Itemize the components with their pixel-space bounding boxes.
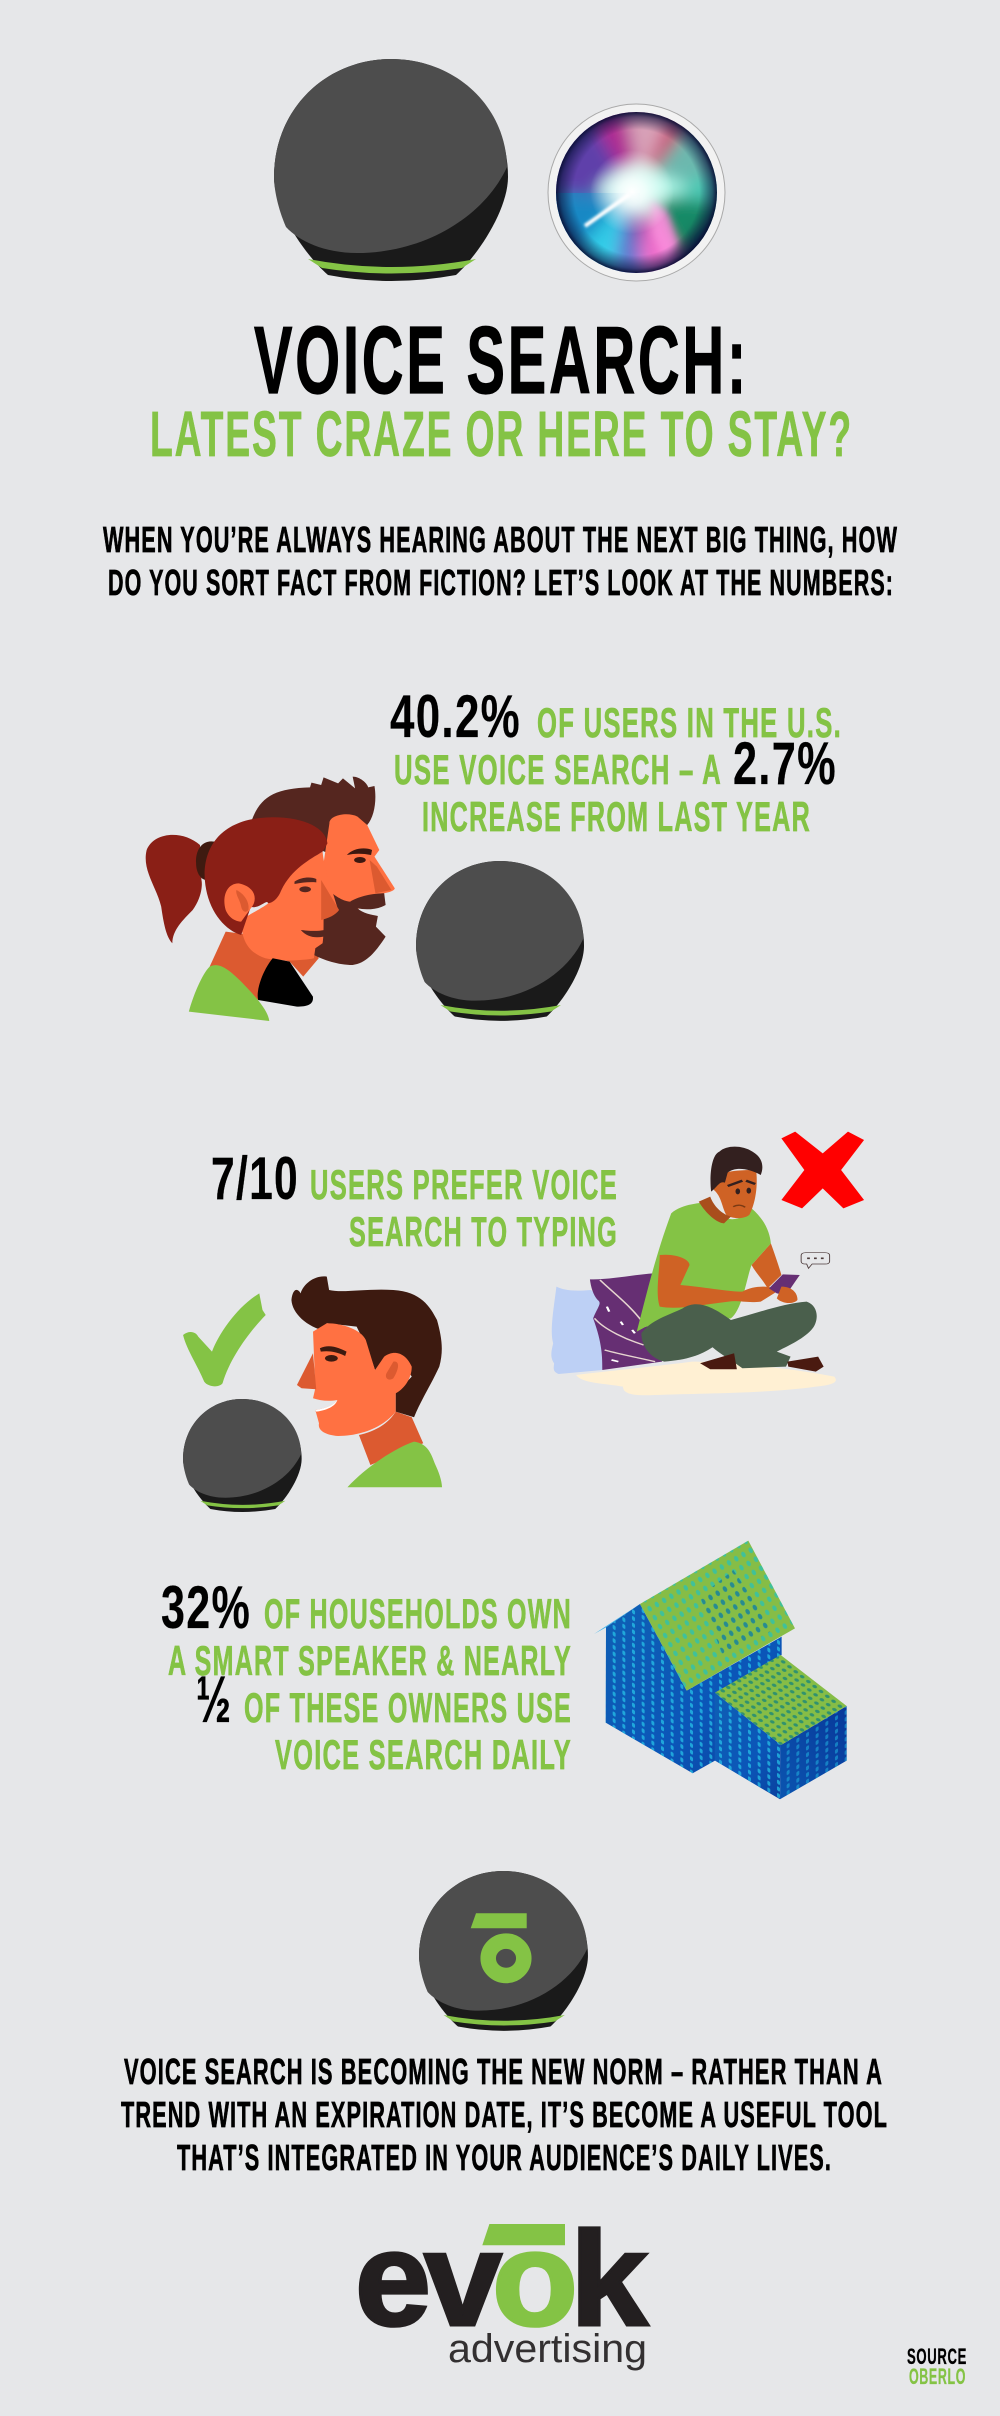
panel: 7/10 stat [183, 1132, 864, 1512]
illustration: couple in profile [146, 777, 395, 1021]
illustration: smiling man in profile [291, 1276, 442, 1487]
closing text [121, 2051, 888, 2178]
stat text: 32% of households: 32% [161, 1574, 251, 1641]
stat text: 32% of households [161, 1574, 572, 1778]
source note [907, 2344, 967, 2389]
icon: smart speaker [416, 861, 584, 1021]
stat text: 40.2% of users: USE VOICE SEARCH – A [394, 746, 722, 793]
illustration: man sitting with phone [551, 1147, 836, 1395]
logo: evok advertising: e [355, 2205, 431, 2354]
logo: evok advertising: v [424, 2205, 502, 2354]
illustration: house with digital pattern [594, 1541, 847, 1799]
stat text: 40.2% of users [390, 683, 842, 840]
stat text: 32% of households: ½ [196, 1662, 233, 1736]
icon: siri orb [548, 104, 726, 282]
stat text: 32% of households: VOICE SEARCH DAILY [275, 1731, 572, 1778]
intro text [103, 519, 898, 603]
logo: evok advertising: advertising [448, 2327, 647, 2371]
icon: smart speaker [183, 1399, 302, 1512]
stat text: 40.2% of users: 40.2% [390, 683, 521, 750]
stat text: 32% of households: OF HOUSEHOLDS OWN [264, 1590, 572, 1637]
icon: green check [183, 1293, 266, 1386]
icon: red cross [781, 1132, 864, 1208]
logo: evok advertising [355, 2205, 648, 2371]
stat text: 32% of households: OF THESE OWNERS USE [244, 1684, 572, 1731]
illustration: man typing on phone, red cross and smiling man with check [183, 1132, 864, 1487]
stat text: 7/10 users: 7/10 [211, 1145, 299, 1212]
panel: 32% stat [161, 1541, 847, 1799]
icon: smart speaker hero [274, 59, 508, 281]
logo: evok advertising: k [570, 2205, 648, 2354]
stat text: 7/10 users [211, 1145, 618, 1255]
stat text: 40.2% of users: 2.7% [733, 730, 837, 797]
stat text: 32% of households: A SMART SPEAKER & NEARLY [168, 1637, 572, 1684]
logo: evok advertising: o [492, 2205, 578, 2354]
panel: 40.2% stat [146, 683, 842, 1021]
stat text: 7/10 users: SEARCH TO TYPING [349, 1208, 618, 1255]
stat text: 7/10 users: USERS PREFER VOICE [310, 1161, 618, 1208]
icon: speaker with evok logo [419, 1871, 588, 2031]
